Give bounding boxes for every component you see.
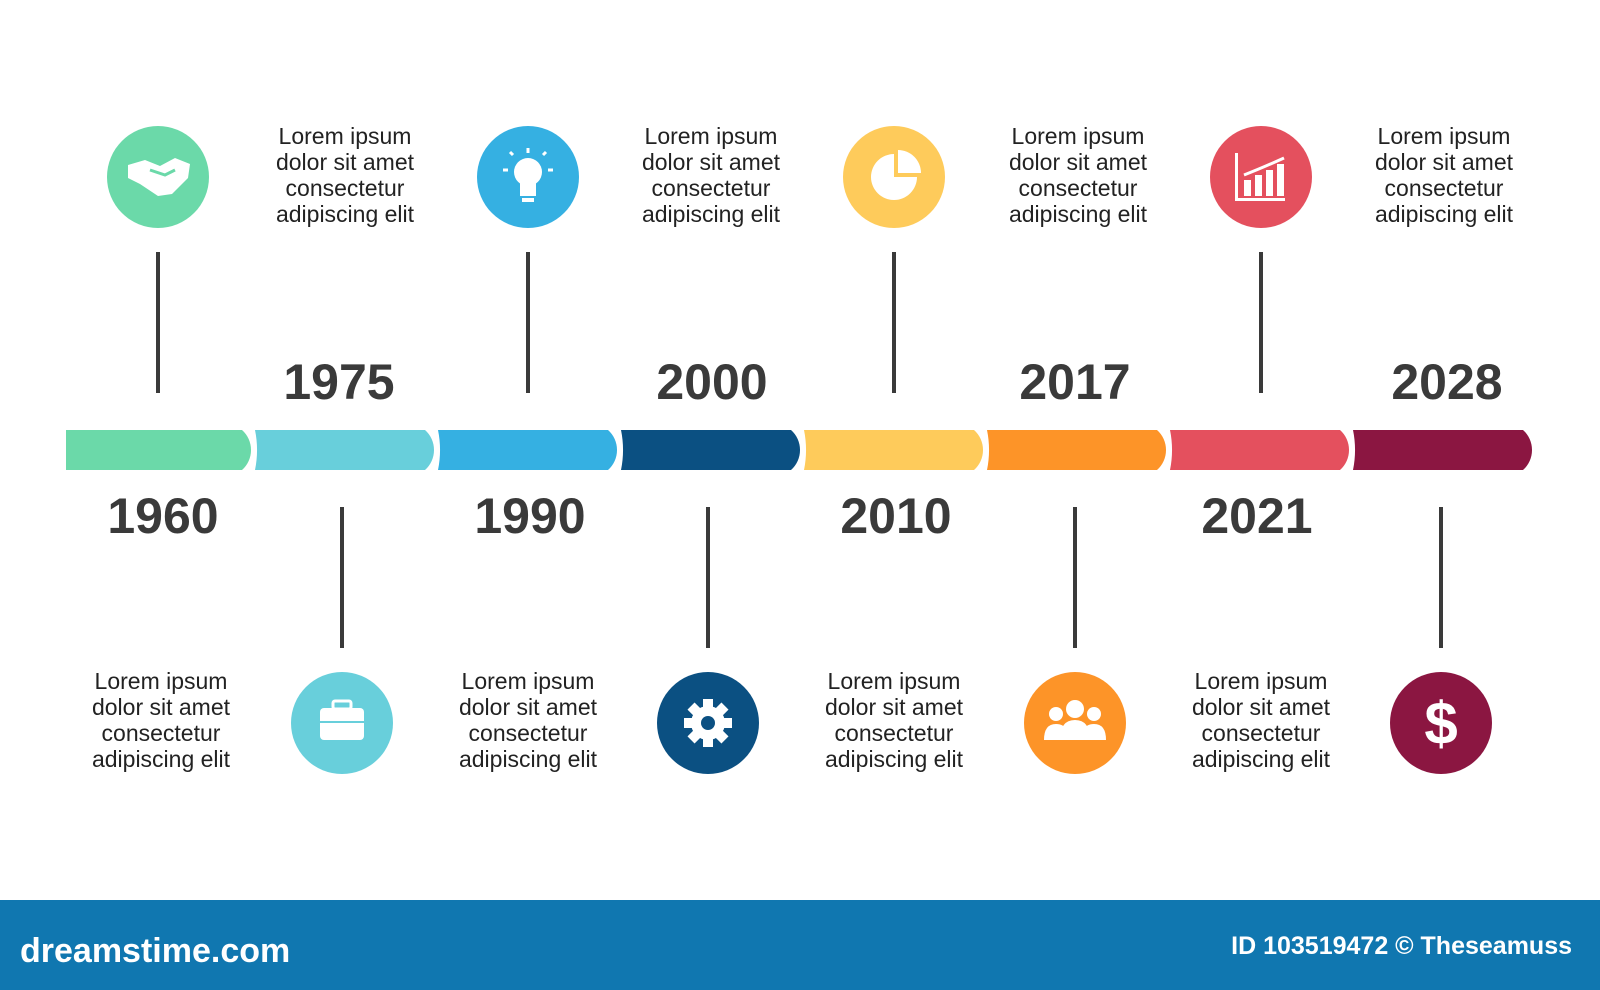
timeline bar — [66, 430, 1532, 470]
text block 1960: adipiscing elit — [92, 746, 231, 772]
icon: people — [1024, 672, 1126, 774]
text block 1975 — [276, 123, 415, 227]
years bottom — [107, 488, 1313, 544]
text block 2010: consectetur — [835, 720, 954, 746]
years bottom: 2010 — [840, 488, 952, 544]
text block 2028: Lorem ipsum — [1378, 123, 1510, 149]
text block 1975: dolor sit amet — [276, 149, 415, 175]
connector lines — [158, 252, 1441, 648]
text block 2028 — [1375, 123, 1514, 227]
years top: 2017 — [1019, 354, 1131, 410]
text block 2010: adipiscing elit — [825, 746, 964, 772]
icon: gear — [657, 672, 759, 774]
text block 2000 — [642, 123, 781, 227]
text block 2028: adipiscing elit — [1375, 201, 1514, 227]
footer banner: dreamstime.com — [20, 932, 290, 970]
icon: handshake — [107, 126, 209, 228]
years top: 1975 — [283, 354, 395, 410]
years top — [283, 354, 1503, 410]
text block 2021: consectetur — [1202, 720, 1321, 746]
years top: 2000 — [656, 354, 768, 410]
icon: lightbulb — [477, 126, 579, 228]
text block 2000: Lorem ipsum — [645, 123, 777, 149]
text block 1990: Lorem ipsum — [462, 668, 594, 694]
text block 2000: adipiscing elit — [642, 201, 781, 227]
footer banner: ID 103519472 © Theseamuss — [1231, 932, 1572, 960]
text block 2017: adipiscing elit — [1009, 201, 1148, 227]
text block 1960: Lorem ipsum — [95, 668, 227, 694]
text block 2017 — [1009, 123, 1148, 227]
text block 1960: dolor sit amet — [92, 694, 231, 720]
text block 2010 — [825, 668, 964, 772]
text block 2021: dolor sit amet — [1192, 694, 1331, 720]
footer banner — [0, 900, 1600, 990]
text block 2000: dolor sit amet — [642, 149, 781, 175]
text block 2010: dolor sit amet — [825, 694, 964, 720]
text block 2021 — [1192, 668, 1331, 772]
text block 2010: Lorem ipsum — [828, 668, 960, 694]
text block 1975: Lorem ipsum — [279, 123, 411, 149]
text block 1960: consectetur — [102, 720, 221, 746]
text block 2021: adipiscing elit — [1192, 746, 1331, 772]
icon: bar chart — [1210, 126, 1312, 228]
text block 1960 — [92, 668, 231, 772]
years top: 2028 — [1391, 354, 1503, 410]
years bottom: 2021 — [1201, 488, 1313, 544]
text block 2000: consectetur — [652, 175, 771, 201]
text block 1990: dolor sit amet — [459, 694, 598, 720]
text block 2017: dolor sit amet — [1009, 149, 1148, 175]
text block 1990: adipiscing elit — [459, 746, 598, 772]
years bottom: 1990 — [474, 488, 586, 544]
icon: briefcase — [291, 672, 393, 774]
years bottom: 1960 — [107, 488, 219, 544]
text block 1975: adipiscing elit — [276, 201, 415, 227]
text block 2017: Lorem ipsum — [1012, 123, 1144, 149]
icon: pie chart — [843, 126, 945, 228]
text block 2028: dolor sit amet — [1375, 149, 1514, 175]
icon: dollar: $ — [1424, 690, 1458, 757]
icon: dollar — [1390, 672, 1492, 774]
text block 2028: consectetur — [1385, 175, 1504, 201]
text block 2021: Lorem ipsum — [1195, 668, 1327, 694]
text block 1990 — [459, 668, 598, 772]
text block 1975: consectetur — [286, 175, 405, 201]
text block 2017: consectetur — [1019, 175, 1138, 201]
text block 1990: consectetur — [469, 720, 588, 746]
